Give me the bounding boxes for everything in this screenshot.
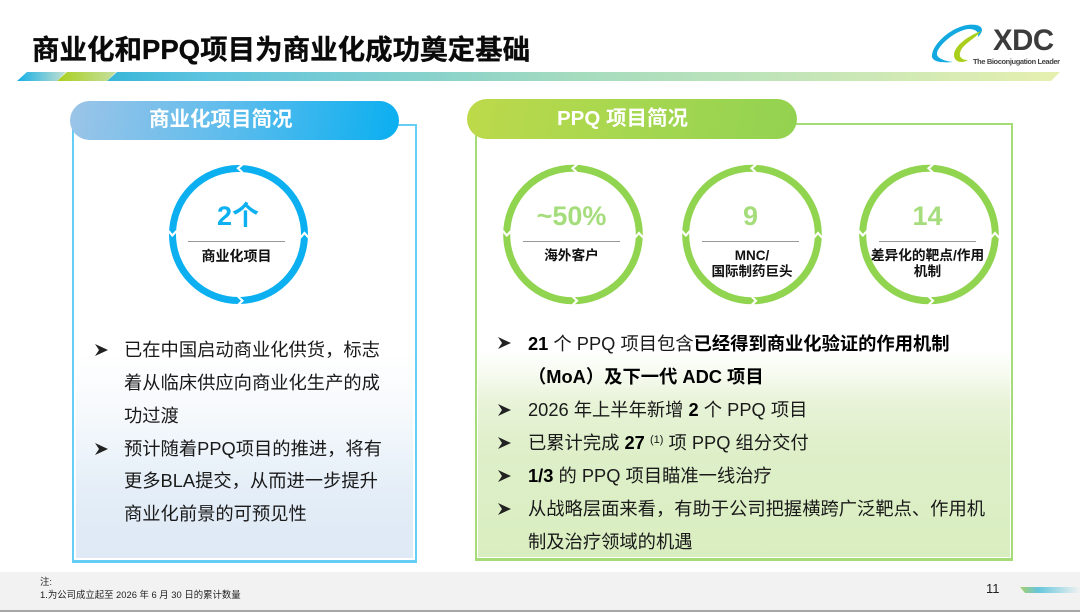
logo wordmark: XDC	[993, 24, 1054, 57]
label	[871, 248, 984, 279]
icon: bullet	[498, 437, 511, 449]
icon: green ring	[859, 164, 999, 304]
logo: XDC	[932, 24, 1060, 66]
list: PPQ bullets: 已累计完成 27 (1) 项 PPQ 组分交付	[528, 432, 809, 453]
value: 14	[912, 201, 943, 231]
list: PPQ bullets: 制及治疗领域的机遇	[528, 531, 693, 552]
footnote	[40, 576, 241, 600]
panel: PPQ projects	[475, 123, 1013, 561]
list: PPQ bullets: 2026 年上半年新增 2 个 PPQ 项目	[528, 399, 807, 420]
label: 商业化项目	[202, 248, 272, 264]
icon: bullet	[498, 503, 511, 515]
title gradient bar	[17, 72, 1060, 81]
ring stat: MNC	[682, 164, 822, 304]
footer gradient mark	[1020, 587, 1078, 593]
label	[712, 248, 792, 279]
list: PPQ bullets	[498, 333, 985, 552]
heading: PPQ projects	[467, 99, 797, 139]
icon: bullet	[498, 404, 511, 416]
label: MNC/	[735, 248, 769, 263]
icon: green ring	[682, 164, 822, 304]
value: 9	[743, 201, 758, 231]
title: 商业化和PPQ项目为商业化成功奠定基础	[32, 34, 530, 65]
value: ~50%	[537, 201, 606, 231]
panel: commercial projects	[72, 124, 417, 563]
label: 海外客户	[544, 248, 599, 263]
icon: bullet	[498, 470, 511, 482]
list: commercial bullets: 更多BLA提交，从而进一步提升	[124, 470, 378, 491]
logo tagline: The Bioconjugation Leader	[973, 57, 1060, 66]
list: commercial bullets: 功过渡	[124, 405, 179, 426]
icon: blue ring	[169, 165, 308, 304]
footnote: 1.为公司成立起至 2026 年 6 月 30 日的累计数量	[40, 589, 241, 600]
list: commercial bullets: 着从临床供应向商业化生产的成	[124, 372, 380, 393]
heading: PPQ projects: PPQ 项目简况	[557, 107, 688, 130]
list: commercial bullets: 预计随着PPQ项目的推进，将有	[124, 438, 382, 459]
list: commercial bullets	[95, 339, 382, 524]
heading: commercial projects	[70, 101, 399, 140]
list: commercial bullets: 已在中国启动商业化供货，标志	[124, 339, 380, 360]
label: 差异化的靶点/作用	[871, 248, 984, 263]
footer band	[0, 572, 1080, 612]
list: commercial bullets: 商业化前景的可预见性	[124, 503, 307, 524]
ring stat: targets	[859, 164, 999, 304]
label: 国际制药巨头	[712, 264, 792, 279]
icon: bullet	[498, 337, 511, 349]
label: 机制	[914, 264, 941, 279]
ring stat: overseas customers	[503, 164, 643, 304]
list: PPQ bullets: （MoA）及下一代 ADC 项目	[528, 366, 764, 387]
value: 2个	[217, 201, 259, 231]
icon: green ring	[503, 164, 643, 304]
list: PPQ bullets: 1/3 的 PPQ 项目瞄准一线治疗	[528, 465, 772, 486]
icon: logo swoosh	[932, 24, 982, 62]
list: PPQ bullets: 21 个 PPQ 项目包含已经得到商业化验证的作用机制	[528, 333, 950, 354]
ring stat: 2 commercial projects	[169, 165, 308, 304]
icon: bullet	[95, 443, 108, 455]
page number: 11	[986, 581, 1000, 596]
list: PPQ bullets: 从战略层面来看，有助于公司把握横跨广泛靶点、作用机	[528, 498, 985, 519]
heading: commercial projects: 商业化项目简况	[149, 108, 292, 131]
icon: bullet	[95, 344, 108, 356]
footnote: 注:	[40, 576, 52, 587]
